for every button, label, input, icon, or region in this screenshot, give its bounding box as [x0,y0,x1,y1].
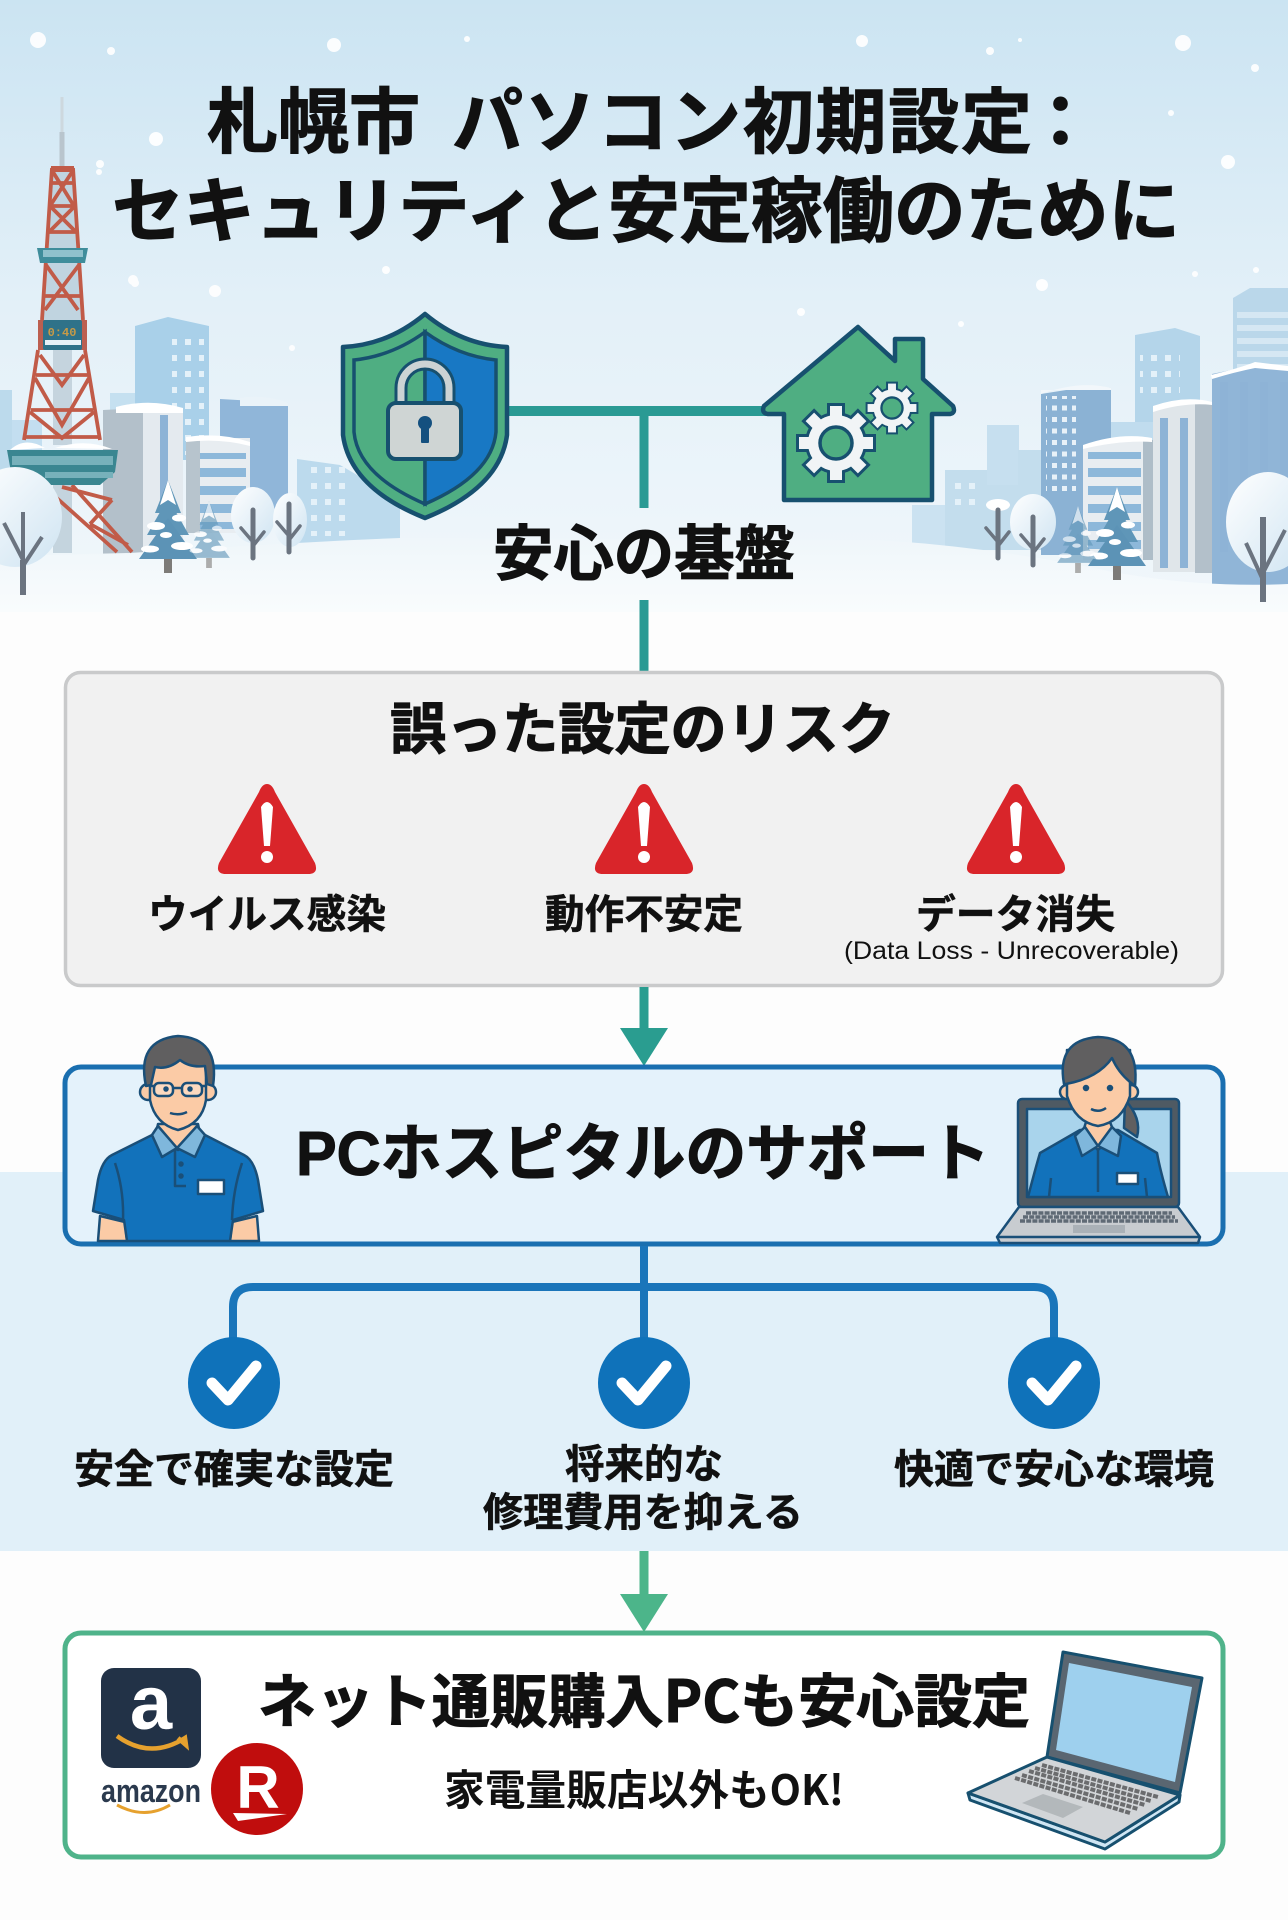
risk: data loss [844,784,1179,965]
heading: risks: 誤った設定のリスク [390,685,895,766]
skyline: left buildings [0,317,400,555]
skyline: right buildings [912,288,1288,590]
icon: amazon app: amazon [101,1773,201,1809]
connector: foundation T line [505,406,767,672]
heading: foundation of peace of mind: 安心の基盤 [493,506,795,593]
panel: risks of wrong settings [66,672,1222,986]
arrow: risks to support [620,987,668,1066]
connector: support to benefits tree [233,1246,1054,1340]
heading: support: PCホスピタルのサポート [296,1120,990,1189]
benefit: safe and reliable settings [74,1337,394,1495]
subheading: 家電量販店以外もOK! [444,1757,844,1818]
risk: data loss: (Data Loss - Unrecoverable) [844,937,1179,965]
risk: data loss: データ消失 [916,882,1115,940]
staff: woman on laptop screen [997,1037,1200,1243]
panel: PC Hospital support [65,1036,1223,1244]
title: パソコン初期設定 [452,66,1032,168]
title [112,66,1180,257]
icon: house with gears [763,327,954,500]
benefit: safe and reliable settings: 安全で確実な設定 [74,1437,394,1495]
panel: online purchase [65,1633,1223,1857]
risk: virus infection: ウイルス感染 [148,882,386,940]
arrow: benefits to online purchase [620,1551,668,1632]
benefit: limit future repair costs: 修理費用を抑える [483,1480,803,1538]
icon: Sapporo TV tower: 0:40 [48,326,76,340]
heading: online purchase PC: ネット通販購入PCも安心設定 [258,1655,1030,1739]
icon: Sapporo TV tower [7,97,132,553]
title: 札幌市 [207,66,420,168]
risk: virus infection [148,784,386,940]
snowy ground [0,538,1288,612]
title: ： [1025,66,1096,168]
risk: unstable operation [545,784,743,940]
risk: unstable operation: 動作不安定 [545,882,743,940]
icon: security shield with padlock [343,314,507,518]
trees right [986,472,1288,602]
trees left [0,467,307,595]
icon: laptop [968,1652,1202,1849]
laptop keyboard [1015,1765,1158,1813]
benefit: comfortable environment [894,1337,1214,1495]
benefit: limit future repair costs [483,1337,803,1538]
staff: man in polo [93,1036,263,1241]
title: セキュリティと安定稼働のために [112,155,1180,257]
background: pale blue benefits band [0,1172,1288,1551]
header scene: snowy Sapporo [0,0,1288,612]
icon: amazon app: a [130,1661,173,1746]
icon: amazon app [101,1661,201,1812]
icon: Rakuten: R [236,1754,280,1821]
icon: Rakuten [211,1743,303,1835]
snowflakes [30,32,1259,351]
sky [0,0,1288,612]
benefit: limit future repair costs: 将来的な [565,1432,723,1490]
benefit: comfortable environment: 快適で安心な環境 [894,1437,1214,1495]
